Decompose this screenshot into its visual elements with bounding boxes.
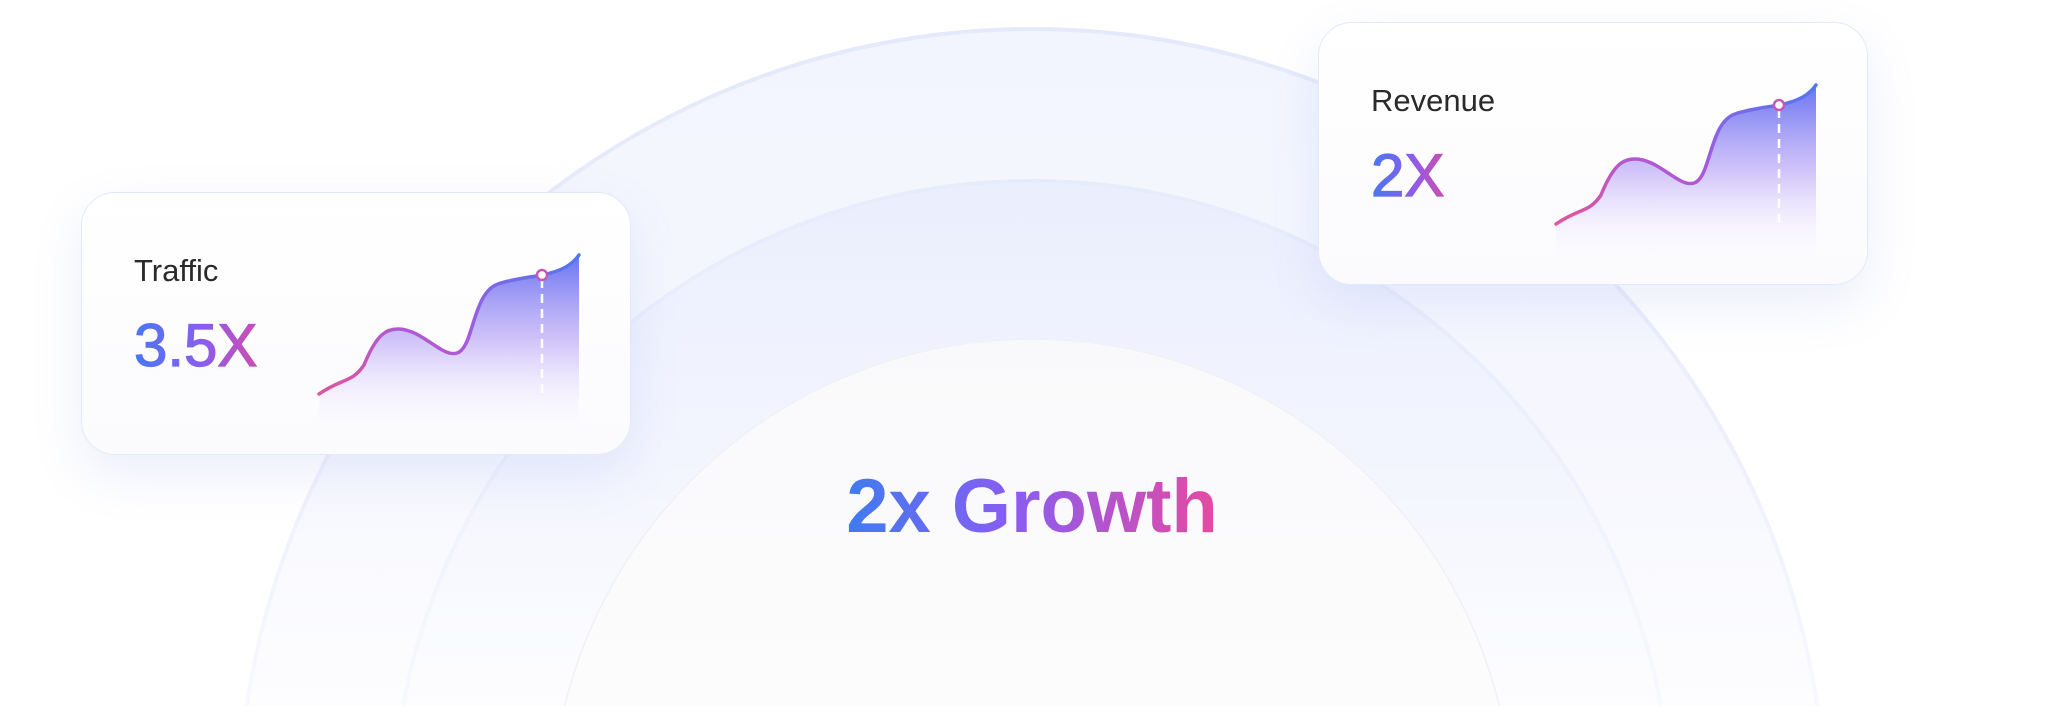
- label: Revenue: Revenue: [1371, 83, 1495, 118]
- label: Traffic: Traffic: [134, 253, 218, 288]
- value: 3.5X: 3.5X: [134, 312, 257, 379]
- panel: traffic card: [81, 192, 631, 455]
- value: 2X: 2X: [1371, 142, 1444, 209]
- chart: revenue line: [1554, 83, 1818, 230]
- panel: revenue card: [1318, 22, 1868, 285]
- chart: traffic line: [317, 253, 581, 400]
- headline: 2x Growth: 2x Growth: [846, 464, 1218, 549]
